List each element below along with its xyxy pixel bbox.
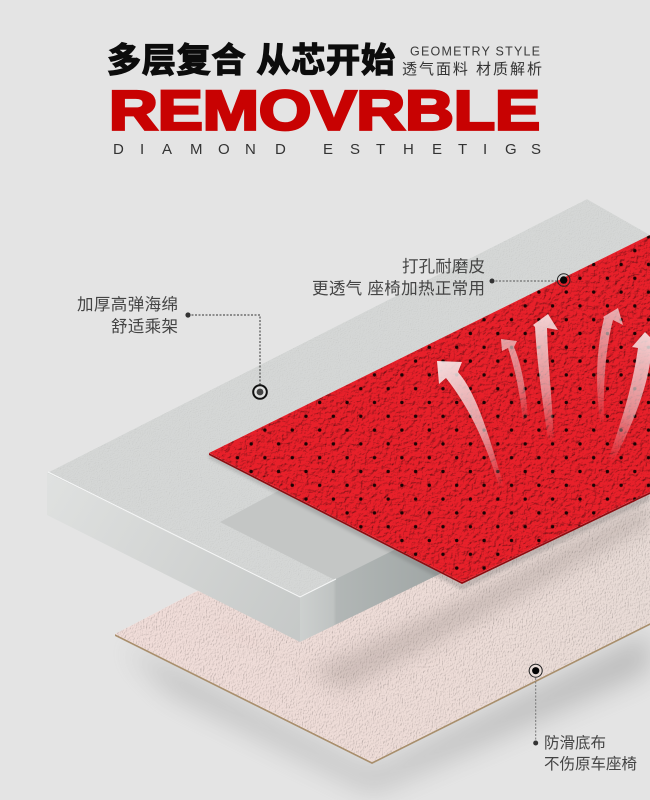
foam shadow on fabric bbox=[315, 503, 650, 692]
foam label: 加厚高弹海绵 bbox=[77, 295, 178, 314]
subtitle: English: GEOMETRY STYLE bbox=[410, 44, 540, 58]
layer: anti-slip fabric base bbox=[115, 494, 650, 796]
fabric label: 不伤原车座椅 bbox=[544, 755, 637, 773]
foam top face bbox=[47, 199, 650, 597]
brand wordmark: REMOVRBLE bbox=[109, 78, 540, 142]
arrow 3 bbox=[533, 314, 558, 440]
shadow from leather on foam bbox=[220, 490, 400, 580]
leather leader line bbox=[492, 280, 557, 282]
fabric edge bbox=[115, 623, 650, 764]
arrow 2 bbox=[501, 339, 528, 422]
foam front face bbox=[47, 473, 300, 642]
leather marker bbox=[557, 274, 570, 286]
foam right face bbox=[300, 522, 450, 642]
header title block bbox=[107, 42, 542, 158]
foam label: 舒适乘架 bbox=[111, 317, 178, 336]
perforation dots bbox=[209, 235, 650, 582]
arrow 4 bbox=[597, 308, 623, 422]
callout: foam bbox=[77, 295, 267, 399]
fabric surface bbox=[115, 440, 650, 762]
headline: Chinese: 多层复合 从芯开始 bbox=[107, 42, 395, 80]
fabric leader line bbox=[535, 678, 537, 741]
leather edge bbox=[209, 453, 650, 584]
callout: leather bbox=[312, 257, 570, 298]
foam label bbox=[77, 295, 178, 336]
tagline: DIAMONDESTHETIGS bbox=[113, 141, 541, 158]
leather label bbox=[312, 257, 485, 298]
leather surface bbox=[209, 235, 650, 582]
fabric label bbox=[544, 734, 637, 773]
fabric shadow on background bbox=[125, 632, 650, 790]
fabric marker bbox=[529, 664, 542, 677]
leather label: 更透气 座椅加热正常用 bbox=[312, 279, 485, 298]
leather shadow bbox=[209, 453, 650, 590]
foam highlight edge bbox=[48, 472, 336, 597]
layer: high-resilience foam bbox=[47, 199, 650, 642]
arrow 1 bbox=[437, 361, 505, 490]
leather label: 打孔耐磨皮 bbox=[402, 257, 485, 276]
subtitle: Chinese: 透气面料 材质解析 bbox=[402, 61, 542, 78]
callout: fabric bbox=[529, 664, 637, 773]
foam marker bbox=[253, 385, 267, 399]
fabric label: 防滑底布 bbox=[544, 734, 606, 752]
layer: perforated red leather bbox=[209, 235, 650, 590]
foam leader line bbox=[188, 315, 260, 385]
airflow arrows bbox=[437, 308, 650, 490]
arrow 5 bbox=[608, 332, 650, 462]
